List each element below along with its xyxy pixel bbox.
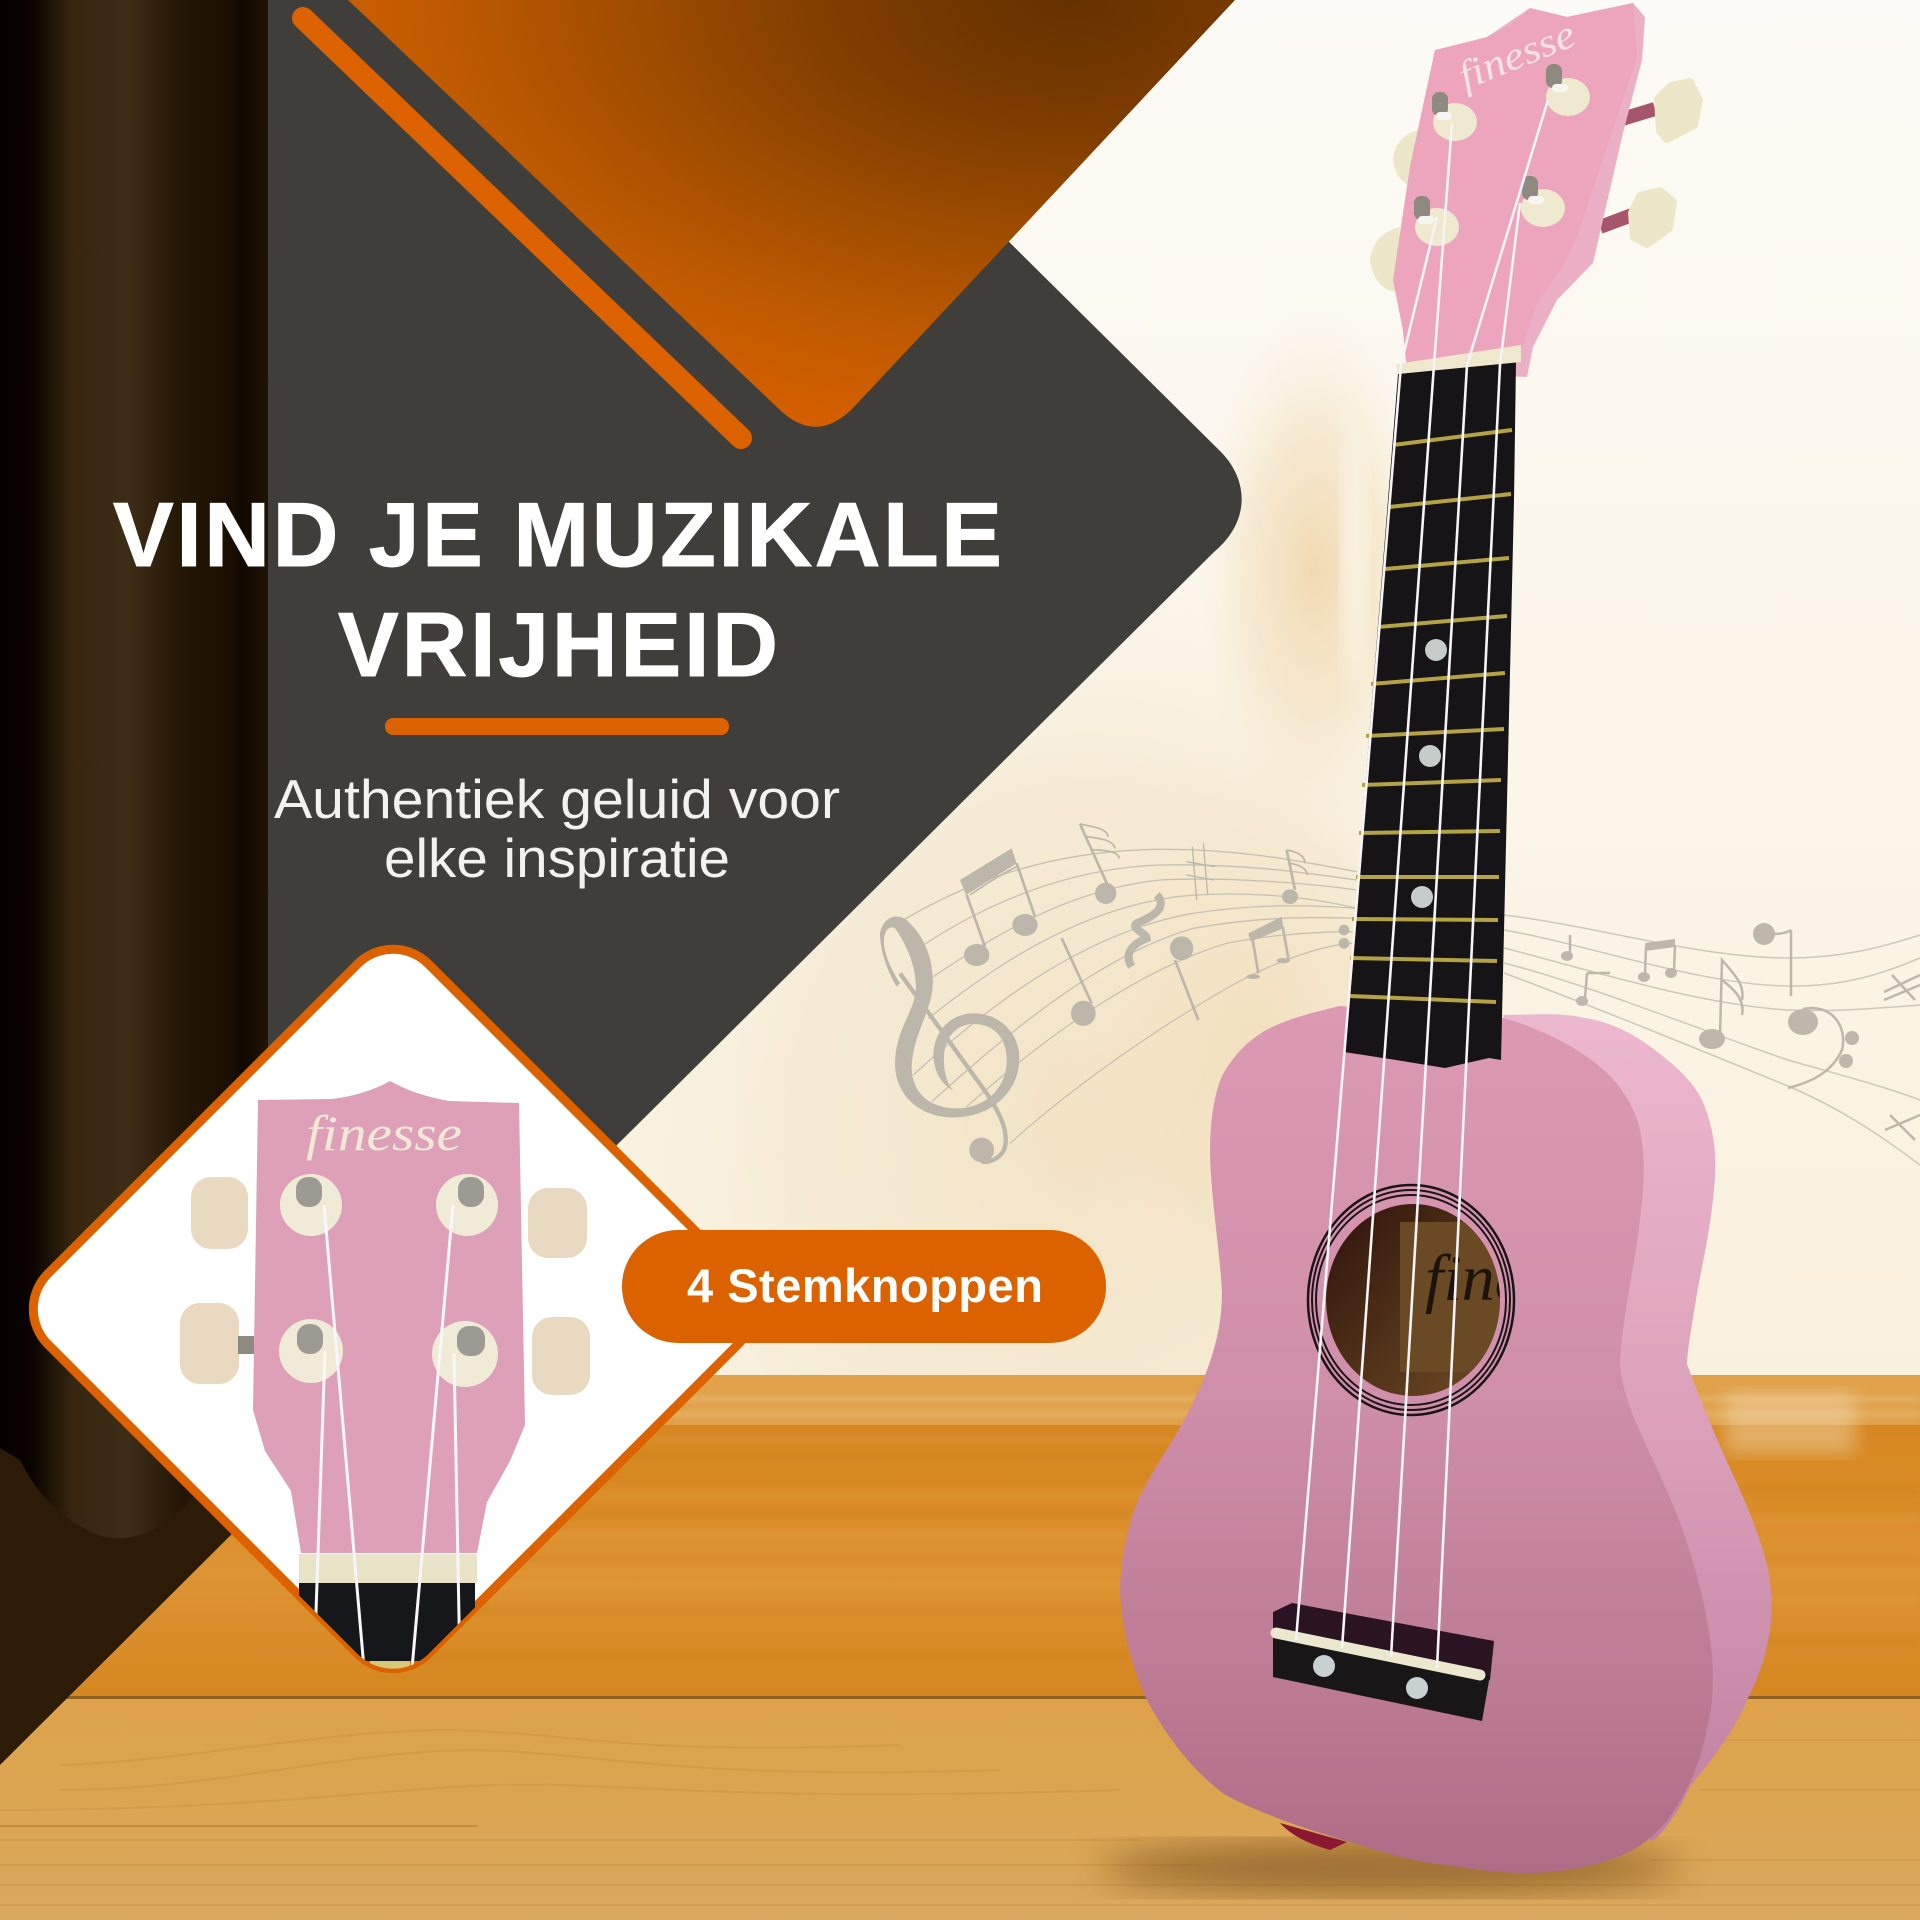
orange diagonal bar — [303, 18, 741, 438]
title — [113, 485, 1002, 696]
headstock: finesse — [1452, 11, 1581, 98]
dark grey panel — [268, 0, 1242, 1490]
fret inlays — [1411, 639, 1447, 908]
inset fingerboard — [299, 1583, 475, 1661]
background: wood floor — [0, 1696, 1920, 1920]
inset tuning knobs — [180, 1177, 590, 1395]
fingerboard — [1344, 361, 1516, 1068]
title: VRIJHEID — [338, 595, 778, 696]
curtain — [0, 0, 268, 1538]
inset: headstock close-up diamond — [13, 929, 773, 1689]
ukulele body front — [1120, 1006, 1713, 1873]
background: baseboard — [0, 1375, 1920, 1700]
sound hole — [1308, 1185, 1524, 1415]
ukulele — [1120, 3, 1772, 1873]
subtitle — [274, 768, 840, 889]
dark floor shadow triangle — [0, 1000, 268, 1765]
inset headstock — [253, 1081, 525, 1553]
headstock — [1370, 3, 1699, 377]
inset washers and posts — [279, 1174, 498, 1387]
inset nut — [299, 1554, 477, 1583]
inset: headstock close-up diamond: finesse — [306, 1105, 462, 1161]
left tuning knobs — [1370, 130, 1420, 292]
nut — [1396, 345, 1521, 374]
title: VIND JE MUZIKALE — [113, 485, 1002, 586]
subtitle: Authentiek geluid voor — [274, 768, 840, 830]
music notes right — [1504, 915, 1920, 1165]
right tuning knobs — [1632, 82, 1699, 244]
subtitle: elke inspiratie — [384, 827, 730, 889]
orange top shape — [348, 0, 1235, 427]
tuning washers and posts — [1414, 64, 1590, 246]
sound hole: fine — [1425, 1242, 1524, 1315]
music notes left — [880, 824, 1357, 1162]
bridge — [1273, 1603, 1494, 1721]
callout pill: 4 Stemknoppen — [687, 1259, 1043, 1312]
callout pill — [622, 1230, 1106, 1343]
inset strings — [314, 1205, 460, 1680]
frets — [1349, 430, 1512, 1002]
strings — [1296, 100, 1548, 1668]
heading underline — [385, 718, 729, 735]
ukulele body side — [1503, 1014, 1772, 1841]
tuning knob shafts — [1600, 109, 1655, 227]
